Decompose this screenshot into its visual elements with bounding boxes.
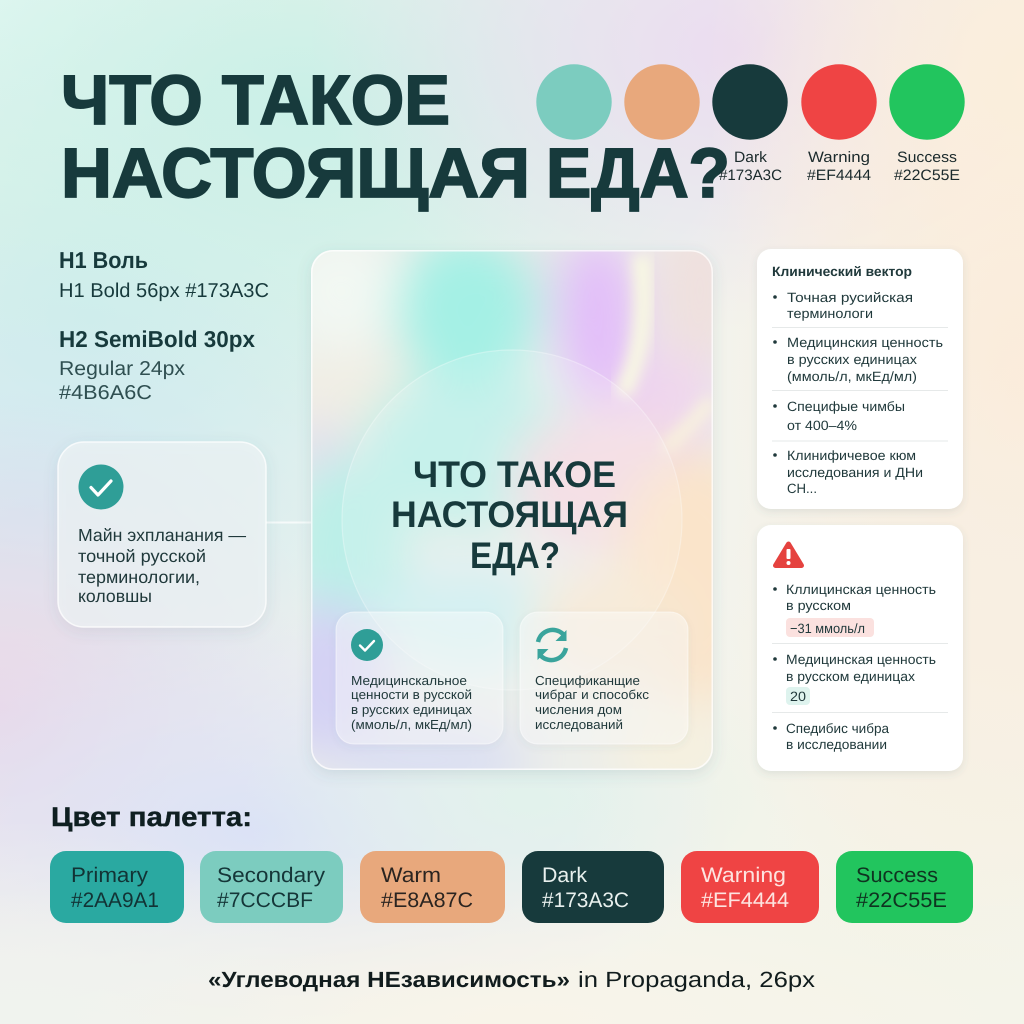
swatch: warm: Warm [381,864,441,887]
list: Кллицинская ценность [786,582,936,597]
left callout card [58,442,266,627]
panel title [391,454,628,576]
colour circles row [536,64,965,140]
panel title: ЕДА? [470,535,560,576]
footer caption: «Углеводная НЕзависимость» [208,967,570,992]
glass circle [342,350,682,690]
inner card text: чибраг и способкс [535,687,650,702]
panel: warning list [757,525,963,771]
list: в русском единицах [786,669,915,684]
list: терминологи [787,306,873,321]
connector line [266,522,312,524]
panel title: ЧТО ТАКОЕ [413,454,616,495]
title: НАСТОЯЩАЯ [61,134,530,212]
callout text: коловшы [78,586,152,606]
panel iridescent background [311,250,712,768]
icon: refresh [538,630,566,660]
panel: central glass card [306,250,718,776]
inner card text: числения дом [535,702,622,717]
callout text: терминологии, [78,567,200,587]
list: в русском [786,598,851,613]
icon: check [351,629,383,661]
colour circle labels: Success [897,149,957,166]
badge: value [786,687,810,705]
palette heading: Цвет палетта: [51,802,252,832]
icon: check [78,464,124,510]
title: ЧТО ТАКОЕ [61,61,450,139]
inner card text [535,673,650,732]
swatch: warning: Warning [701,864,786,887]
typography specimen text: Regular 24px [59,358,185,380]
colour circle labels [719,149,960,184]
list: (ммоль/л, мкЕд/мл) [787,369,917,384]
card heading: Клинический вектор [772,264,912,279]
list: СН... [787,481,817,496]
swatch: secondary [200,851,343,923]
panel title: НАСТОЯЩАЯ [391,494,628,535]
list: Клинифичевое кюм [787,448,916,463]
inner card text: (ммоль/л, мкЕд/мл) [351,717,472,732]
inner card: medical values [336,612,503,744]
callout text: Майн эхпланания — [78,525,247,545]
swatch: warm [360,851,505,923]
list: Точная русийская [787,290,913,305]
list: в исследовании [786,737,887,752]
swatch: secondary: #7CCCBF [217,889,313,912]
typography specimen text: H1 Воль [59,247,148,273]
list: Медицинския ценность [787,335,943,350]
inner card text: ценности в русской [351,687,472,702]
swatch: dark [522,851,664,923]
inner card text: Медицинскальное [351,673,467,688]
swatch: success: #22C55E [856,889,947,912]
list: Специфые чимбы [787,399,905,414]
callout text [78,525,247,606]
list: от 400–4% [787,418,857,433]
colour circle labels: Dark [734,149,768,166]
panel: clinical vector list [757,249,963,509]
list [772,582,948,752]
typography specimen text: H2 SemiBold 30px [59,326,255,352]
icon: warning triangle [776,544,802,566]
swatch: success [836,851,973,923]
callout text: точной русской [78,546,206,566]
swatch: primary: #2AA9A1 [71,889,159,912]
typography specimen text: #4B6A6C [59,382,152,404]
inner card: specifics [520,612,688,744]
swatch: warning: #EF4444 [701,889,789,912]
swatch: success: Success [856,864,938,887]
footer caption: in Propaganda, 26px [578,967,815,992]
swatch: secondary: Secondary [217,864,326,887]
colour circle labels: Warning [808,149,870,166]
badge: negative value: −31 ммоль/л [790,621,865,636]
inner card text [351,673,473,732]
swatch: primary: Primary [71,864,149,887]
typography specimen text [59,247,269,404]
title [61,61,730,212]
palette swatches [50,851,973,923]
swatch: primary [50,851,184,923]
list: Спедибис чибра [786,721,889,736]
swatch: warning [681,851,819,923]
swatch: dark: #173A3C [542,889,629,912]
list: в русских единицах [787,352,917,367]
inner card text: Спецификанщие [535,673,640,688]
list: исследования и ДНи [787,465,923,480]
swatch: dark: Dark [542,864,588,887]
typography specimen text: H1 Bold 56px #173A3C [59,280,269,302]
swatch: warm: #E8A87C [381,889,473,912]
list: Медицинская ценность [786,652,936,667]
badge: value: 20 [790,689,806,704]
colour circle labels: #173A3C [719,167,782,184]
footer caption [208,967,815,992]
title: ЕДА? [546,134,730,212]
inner card text: в русских единицах [351,702,473,717]
list [772,290,948,496]
inner card text: исследований [535,717,623,732]
colour circle labels: #EF4444 [807,167,871,184]
colour circle labels: #22C55E [894,167,960,184]
